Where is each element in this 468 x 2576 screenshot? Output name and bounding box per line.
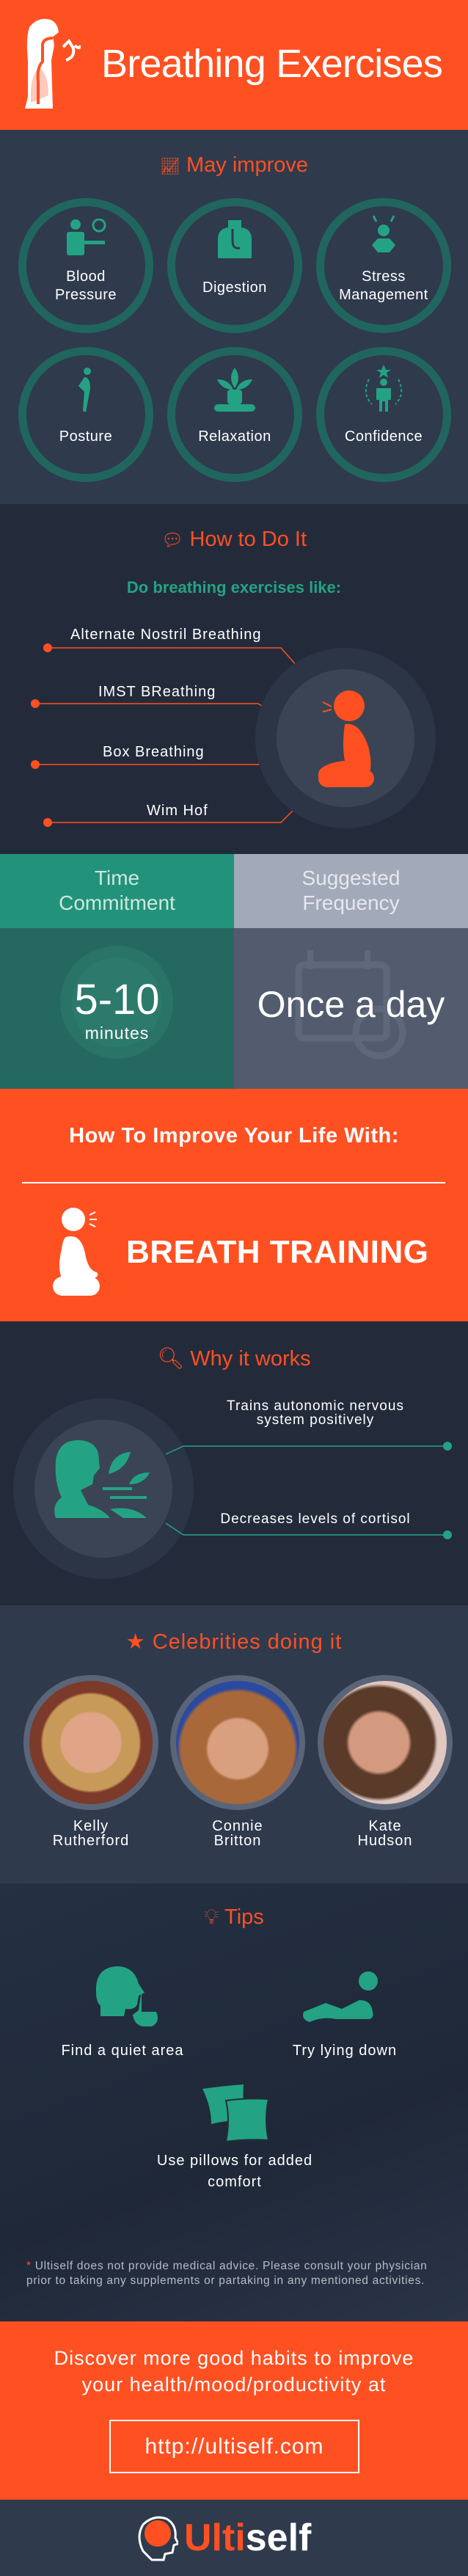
item: relaxation: Relaxation	[198, 428, 271, 445]
diagram: exercises list	[31, 627, 436, 828]
url button	[109, 2420, 359, 2473]
celeb: Kelly Rutherford: Kelly	[73, 1818, 109, 1834]
tip: pillows: Use pillows for added	[157, 2153, 312, 2169]
panel: may improve	[0, 130, 468, 504]
celeb: Connie Britton: Britton	[214, 1833, 261, 1849]
celeb: Kate Hudson: Kate	[368, 1818, 402, 1834]
panel: time commitment	[0, 854, 234, 1089]
tip: quiet area: Find a quiet area	[61, 2043, 184, 2059]
panel: suggested frequency: Once a day	[257, 984, 445, 1025]
panel: time commitment: 5-10	[74, 976, 160, 1024]
banner heading: How To Improve Your Life With:	[69, 1124, 399, 1147]
heading: may improve: 📈︎ May improve	[160, 153, 308, 177]
cta text: your health/mood/productivity at	[82, 2374, 386, 2396]
item: posture	[18, 347, 153, 482]
item: blood pressure: Blood	[66, 269, 106, 285]
item: digestion	[167, 198, 302, 333]
disclaimer: prior to taking any supplements or partaking in any mentioned activities.	[26, 2274, 425, 2287]
icon: breathing figure	[53, 1208, 100, 1296]
celeb: Kate Hudson: Hudson	[358, 1833, 412, 1849]
item: blood pressure	[18, 198, 153, 333]
icon: respiratory system	[25, 19, 81, 109]
url button: http://ultiself.com	[145, 2434, 324, 2459]
disclaimer: * Ultiself does not provide medical advice. Please consult your physician	[26, 2260, 427, 2272]
banner title: BREATH TRAINING	[126, 1234, 428, 1270]
panel: time commitment: Commitment	[59, 891, 175, 914]
panel: suggested frequency	[234, 854, 468, 1089]
cta banner	[0, 2321, 468, 2500]
item: confidence: Confidence	[345, 428, 423, 445]
panel: time commitment: minutes	[85, 1024, 149, 1043]
diagram: exercises list: IMST BReathing	[98, 684, 216, 700]
celeb: Kelly Rutherford: Rutherford	[53, 1833, 129, 1849]
logo: Ultiself	[184, 2517, 311, 2559]
text: reasons: Trains autonomic nervous	[227, 1398, 404, 1414]
diagram: exercises list: Wim Hof	[147, 803, 208, 819]
celeb: Connie Britton: Connie	[212, 1818, 263, 1834]
item: blood pressure: Pressure	[55, 287, 117, 303]
item: confidence	[316, 347, 451, 482]
celeb: Connie Britton	[170, 1675, 305, 1849]
diagram: exercises list: Alternate Nostril Breathing	[70, 627, 261, 643]
tip: pillows: comfort	[208, 2174, 262, 2190]
cta text	[54, 2347, 414, 2396]
panel: tips	[0, 1883, 468, 2321]
heading: how to do it: 💬︎ How to Do It	[161, 528, 307, 551]
title: Breathing Exercises	[101, 42, 442, 86]
footer	[0, 2500, 468, 2576]
celeb: Kate Hudson	[318, 1675, 453, 1849]
cta text: Discover more good habits to improve	[54, 2347, 414, 2369]
item: digestion: Digestion	[202, 280, 267, 296]
panel: how to do it	[0, 504, 468, 854]
heading: celebrities: ★ Celebrities doing it	[126, 1630, 342, 1654]
header	[0, 0, 468, 130]
item: stress management	[316, 198, 451, 333]
heading: why it works: 🔍︎ Why it works	[157, 1347, 311, 1371]
diagram: exercises list: Box Breathing	[103, 744, 205, 760]
tip: lying down: Try lying down	[293, 2043, 397, 2059]
panel: why it works	[0, 1321, 468, 1605]
item: stress management: Management	[339, 287, 428, 303]
item: posture: Posture	[59, 428, 112, 445]
item: stress management: Stress	[362, 269, 406, 285]
disclaimer	[26, 2260, 427, 2287]
heading: tips: 💡︎ Tips	[204, 1905, 264, 1929]
item: relaxation	[167, 347, 302, 482]
panel: suggested frequency: Suggested	[302, 866, 400, 889]
tip: pillows	[157, 2084, 312, 2190]
banner: how to improve	[0, 1089, 468, 1321]
panel: suggested frequency: Frequency	[302, 891, 400, 914]
subheading: Do breathing exercises like:	[127, 578, 341, 596]
tip: quiet area	[61, 1966, 184, 2059]
text: reasons	[227, 1398, 404, 1428]
text: reasons: system positively	[257, 1412, 374, 1428]
panel: celebrities	[0, 1605, 468, 1883]
panel: why it works: Decreases levels of cortisol	[220, 1511, 411, 1527]
tip: lying down	[293, 1971, 397, 2059]
panel: time commitment: Time	[95, 866, 139, 889]
logo	[138, 2517, 311, 2561]
celeb: Kelly Rutherford	[23, 1675, 158, 1849]
